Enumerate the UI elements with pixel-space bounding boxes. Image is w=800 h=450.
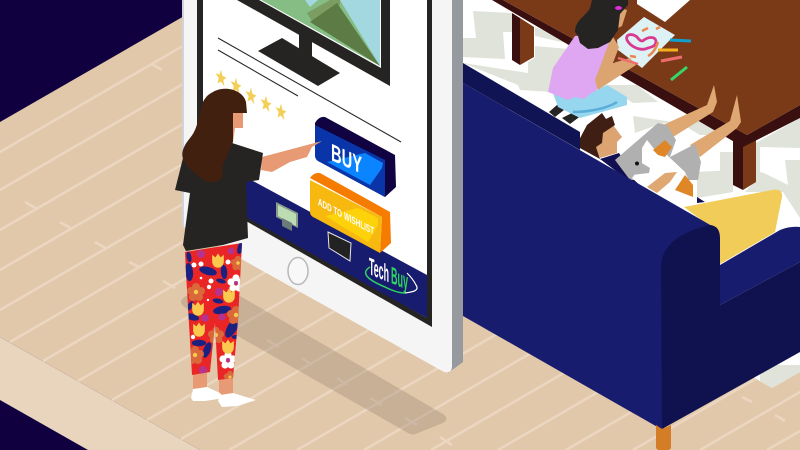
screen bezel (197, 0, 432, 327)
tablet side (448, 0, 463, 373)
wishlist button (310, 173, 391, 253)
tablet left edge (182, 0, 184, 228)
screen (203, 0, 427, 318)
long hair (182, 89, 247, 182)
floor edge strip (0, 337, 200, 450)
yellow cushion (684, 190, 782, 264)
monitor stand (258, 30, 340, 86)
sofa cushion gap (697, 197, 705, 203)
tablet body (182, 0, 452, 372)
buy button: BUY (331, 139, 362, 180)
wishlist button: ADD TO WISHLIST (318, 197, 374, 238)
TechBuy logo: Tech (369, 253, 389, 288)
table (492, 0, 800, 190)
dog (632, 140, 697, 207)
pointing arm (261, 141, 322, 172)
boy lying with a dog (578, 85, 741, 207)
girl's top (548, 33, 614, 100)
TechBuy logo: Buy (391, 262, 408, 296)
girl's hair (575, 0, 628, 49)
boy's grey tee (615, 123, 701, 180)
sofa arm and side (661, 225, 800, 429)
girl drawing at the table (548, 0, 638, 124)
small green monitor icon (276, 202, 298, 231)
monitor screen (259, 0, 381, 68)
girl's arm (595, 35, 636, 90)
home button (288, 258, 308, 284)
table top (503, 0, 800, 135)
buy button (315, 117, 396, 197)
boy's shirt (600, 153, 640, 185)
hair clip (615, 6, 622, 10)
left hand (177, 183, 190, 193)
crayons (658, 40, 691, 80)
table leg right (733, 136, 756, 190)
sofa front (463, 83, 712, 429)
child's drawing (617, 17, 675, 68)
table apron (492, 0, 800, 147)
ankles (193, 372, 233, 396)
boy's hair (578, 113, 615, 159)
boy's legs (663, 85, 741, 157)
black shirt (175, 143, 263, 251)
shoes (191, 387, 256, 407)
monitor frame (237, 0, 390, 86)
floral trousers (185, 243, 242, 380)
girl's trousers (553, 85, 627, 118)
table leg left (512, 13, 534, 65)
cast shadow on the floor (181, 296, 446, 434)
patterned rug (463, 0, 800, 400)
sofa back top (463, 63, 580, 150)
description lines (218, 38, 401, 142)
product monitor (237, 0, 390, 86)
crayon in hand (618, 58, 638, 64)
woman pointing at the buy button (175, 89, 322, 407)
girl's feet (549, 105, 582, 124)
sofa backrest side (720, 227, 800, 305)
small black monitor icon (328, 232, 351, 261)
navy bottom band (203, 154, 427, 318)
giant tablet (182, 0, 463, 373)
white sheet of paper (637, 0, 690, 22)
boy's hand (647, 172, 677, 193)
sofa leg (656, 425, 671, 450)
girl's face (618, 8, 627, 28)
rating stars (216, 67, 286, 121)
sofa (463, 63, 800, 450)
boy's face (595, 125, 622, 158)
face (225, 113, 243, 142)
